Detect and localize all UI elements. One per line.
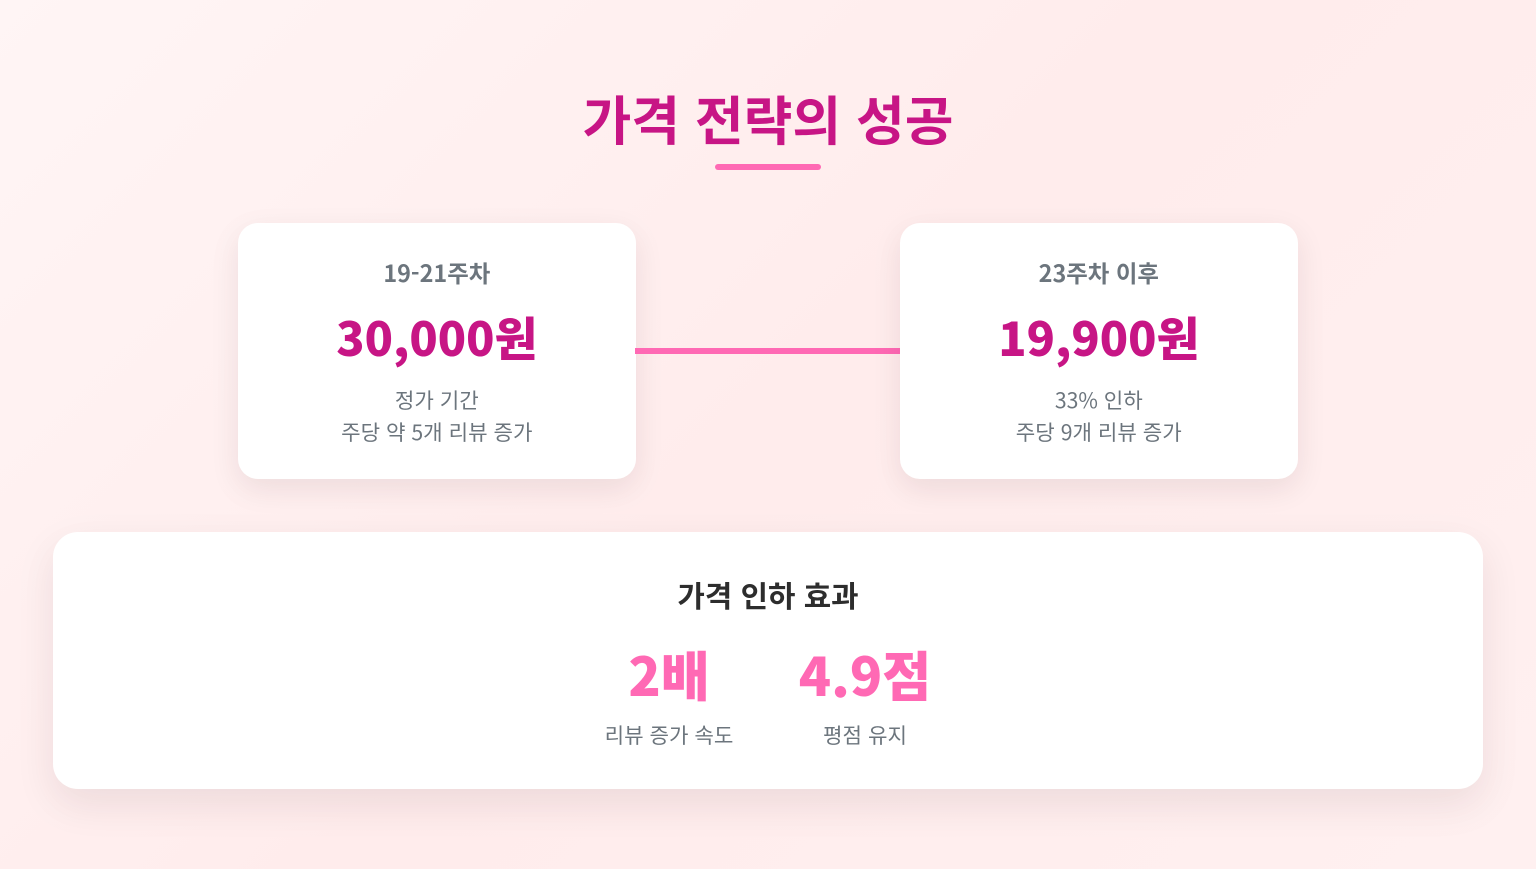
- stat: review speed value: 2배: [628, 635, 710, 712]
- before period label: 19-21주차: [383, 255, 490, 289]
- panel: after price card: [900, 223, 1298, 479]
- before description: 정가 기간: [395, 384, 479, 415]
- stat: review speed label: 리뷰 증가 속도: [605, 719, 733, 750]
- connector line: [635, 348, 901, 354]
- title underline: [715, 164, 821, 170]
- title: 가격 전략의 성공: [582, 80, 954, 156]
- panel: before price card: [238, 223, 636, 479]
- after description: [1016, 384, 1182, 447]
- before price: 30,000원: [336, 303, 537, 370]
- before description: [341, 384, 533, 447]
- stat: rating label: 평점 유지: [823, 719, 907, 750]
- panel: price cut effect: [53, 532, 1483, 789]
- after period label: 23주차 이후: [1039, 255, 1159, 289]
- stat: rating value: 4.9점: [799, 635, 931, 712]
- effect heading: 가격 인하 효과: [677, 572, 859, 616]
- after price: 19,900원: [998, 303, 1199, 370]
- after description: 주당 9개 리뷰 증가: [1016, 416, 1182, 447]
- before description: 주당 약 5개 리뷰 증가: [341, 416, 533, 447]
- after description: 33% 인하: [1055, 384, 1143, 415]
